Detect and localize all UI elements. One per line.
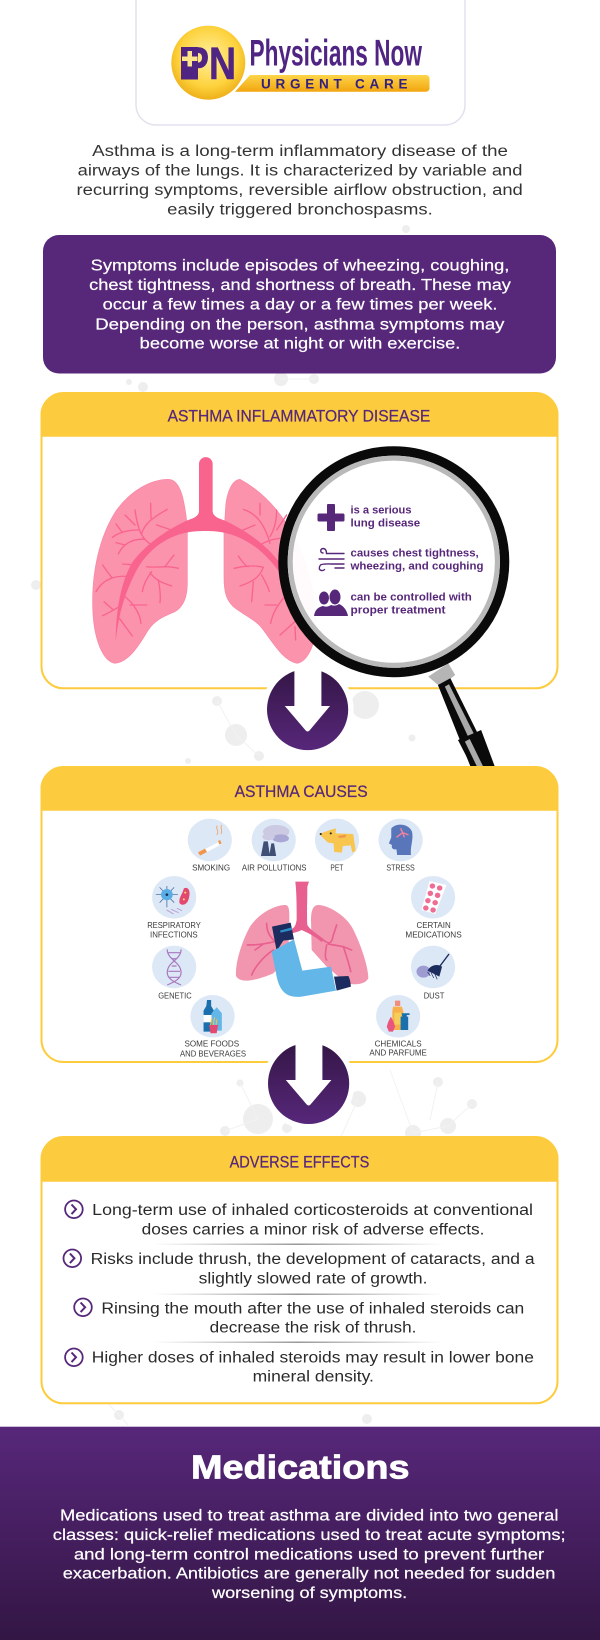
symptoms text: become worse at night or with exercise. [140,336,460,353]
icon: lungs with inhaler [236,882,368,997]
medications text: classes: quick-relief medications used to treat acute symptoms; [53,1527,566,1544]
intro paragraph: easily triggered bronchospasms. [167,202,433,219]
medications text: and long-term control medications used to prevent further [74,1546,544,1563]
medications text [53,1508,566,1602]
panel: asthma inflammatory disease [40,393,558,688]
logo card [136,0,465,125]
item 4: mineral density. [253,1369,374,1386]
cause labels: DUST [424,991,444,1000]
lens text: is a serious [350,504,412,516]
cause labels: SOME FOODS [184,1040,240,1049]
item 3: Rinsing the mouth after the use of inhaled steroids can [101,1300,524,1317]
cause labels: PET [330,863,343,872]
cause labels: AND BEVERAGES [180,1049,246,1058]
item 3: decrease the risk of thrush. [210,1320,416,1337]
item 2 [64,1250,535,1287]
icon: stress [378,819,423,861]
icon: lungs [93,457,316,663]
panel header [40,767,558,811]
icon: dust [411,946,455,988]
item 4: Higher doses of inhaled steroids may result in lower bone [92,1349,534,1366]
symptoms text: chest tightness, and shortness of breath. These may [89,277,511,294]
heading: ADVERSE EFFECTS [230,1152,369,1172]
medications text: worsening of symptoms. [211,1585,407,1602]
cause icons [152,819,455,1038]
cause labels: MEDICATIONS [405,930,462,939]
icon: wind [319,548,344,571]
item 1: doses carries a minor risk of adverse effects. [142,1221,485,1238]
item 3 [74,1298,524,1337]
cause labels: CERTAIN [416,921,451,930]
item 1: Long-term use of inhaled corticosteroids at conventional [92,1202,533,1219]
cause labels: AIR POLLUTIONS [242,863,307,872]
lens text: wheezing, and coughing [349,560,484,572]
icon: genetic [152,946,196,988]
cause labels: GENETIC [158,991,192,1000]
icon: chemicals and parfume [376,995,420,1038]
lens text: proper treatment [350,604,446,616]
intro paragraph [76,143,523,219]
cause labels [147,863,462,1058]
magnifying glass lens [283,451,505,672]
icon: plus [318,504,344,531]
arrow: causes to effects [263,1037,355,1129]
item 4 [65,1348,534,1386]
icon: magnifying glass handle [428,663,497,772]
panel: adverse effects [40,1137,558,1403]
cause labels: CHEMICALS [375,1039,422,1048]
lens text: lung disease [350,517,420,529]
icon: smoking [188,819,232,861]
logo wordmark [235,32,430,92]
logo badge [171,26,245,100]
intro paragraph: recurring symptoms, reversible airflow obstruction, and [76,182,523,199]
cause labels: SMOKING [192,863,230,872]
arrow: disease to causes [262,664,354,756]
logo wordmark: Physicians Now [250,32,422,74]
lens text: can be controlled with [350,591,472,603]
icon: air pollution [252,819,296,861]
logo wordmark: URGENT CARE [261,77,408,92]
cause labels: STRESS [386,863,415,872]
cause labels: INFECTIONS [150,930,198,939]
icon: pet [315,819,359,861]
intro paragraph: airways of the lungs. It is characterized by variable and [78,162,522,179]
logo badge: PN [184,38,236,89]
icon: doctors [314,590,348,616]
icon: medications [411,876,455,919]
panel header [40,1137,558,1182]
symptoms text: Symptoms include episodes of wheezing, coughing, [91,258,509,275]
cause labels: AND PARFUME [369,1049,427,1058]
lens text: causes chest tightness, [350,548,479,560]
item 2: slightly slowed rate of growth. [199,1270,428,1287]
icon: foods and beverages [190,995,235,1038]
intro paragraph: Asthma is a long-term inflammatory disease of the [92,143,508,160]
symptoms panel [43,235,556,374]
heading: ASTHMA INFLAMMATORY DISEASE [168,406,430,426]
heading: ASTHMA CAUSES [235,782,368,801]
panel: medications footer [0,1427,600,1640]
item 2: Risks include thrush, the development of cataracts, and a [91,1251,535,1268]
icon: respiratory infections [152,876,196,919]
lens text [349,504,484,616]
symptoms text [89,258,511,353]
cause labels: RESPIRATORY [147,921,201,930]
symptoms text: occur a few times a day or a few times per week. [103,297,497,314]
symptoms text: Depending on the person, asthma symptoms may [95,316,505,333]
item 1 [65,1200,533,1238]
background molecule pattern [31,225,477,1425]
panel header [40,393,558,437]
panel: asthma causes [40,767,558,1062]
medications text: exacerbation. Antibiotics are generally not needed for sudden [63,1566,555,1583]
medications text: Medications used to treat asthma are divided into two general [60,1508,558,1525]
heading: medications: Medications [191,1448,410,1485]
